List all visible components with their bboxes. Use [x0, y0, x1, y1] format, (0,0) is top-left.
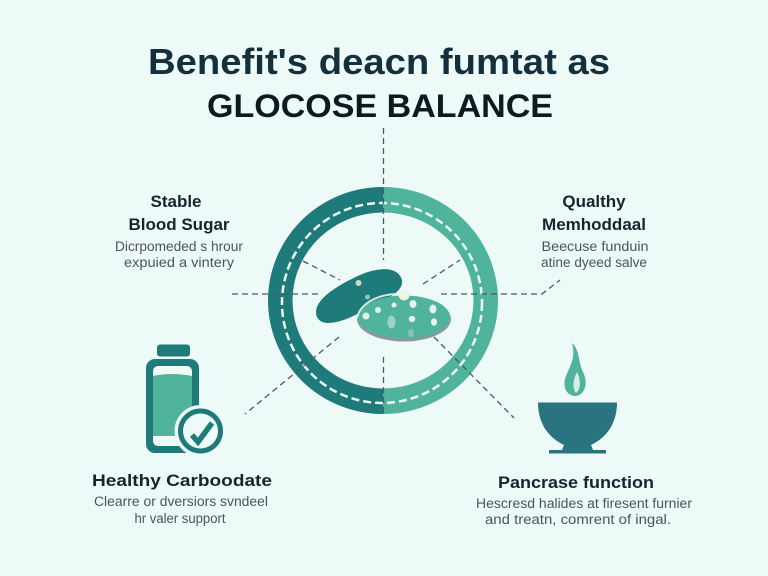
title: Benefit's deacn fumtat as [148, 41, 610, 82]
text block: stable blood sugar [115, 192, 244, 270]
text block: stable blood sugar: Dicrpomeded s hrour [115, 239, 244, 254]
dashed connector lines [232, 128, 560, 418]
dark pill [316, 269, 402, 323]
text block: healthy carboodate: Healthy Carboodate [92, 471, 272, 490]
text block: healthy carboodate [92, 471, 272, 526]
text block: pancrase function: Hescresd halides at firesent furnier [476, 496, 693, 511]
text block: pancrase function: and treatn, comrent of ingal. [485, 512, 671, 527]
text block: stable blood sugar: Blood Sugar [128, 215, 230, 234]
icon: bowl with flame [538, 343, 617, 454]
text block: qualthy memhoddaal [541, 192, 648, 270]
text block: pancrase function [476, 473, 693, 527]
text block: qualthy memhoddaal: Beecuse funduin [542, 239, 648, 254]
text block: healthy carboodate: Clearre or dversiors svndeel [94, 494, 268, 509]
central pills [316, 269, 451, 342]
text block: pancrase function: Pancrase function [498, 473, 654, 492]
text block: qualthy memhoddaal: Qualthy [562, 192, 626, 211]
central ring [268, 187, 498, 414]
speckled pill [357, 296, 451, 342]
text block: stable blood sugar: Stable [150, 192, 202, 211]
text block: stable blood sugar: expuied a vintery [124, 255, 234, 270]
icon: bottle with check [146, 344, 226, 457]
text block: qualthy memhoddaal: Memhoddaal [542, 215, 646, 234]
title [148, 41, 610, 124]
text block: qualthy memhoddaal: atine dyeed salve [541, 255, 647, 270]
text block: healthy carboodate: hr valer support [134, 511, 226, 526]
title: GLOCOSE BALANCE [207, 88, 553, 124]
